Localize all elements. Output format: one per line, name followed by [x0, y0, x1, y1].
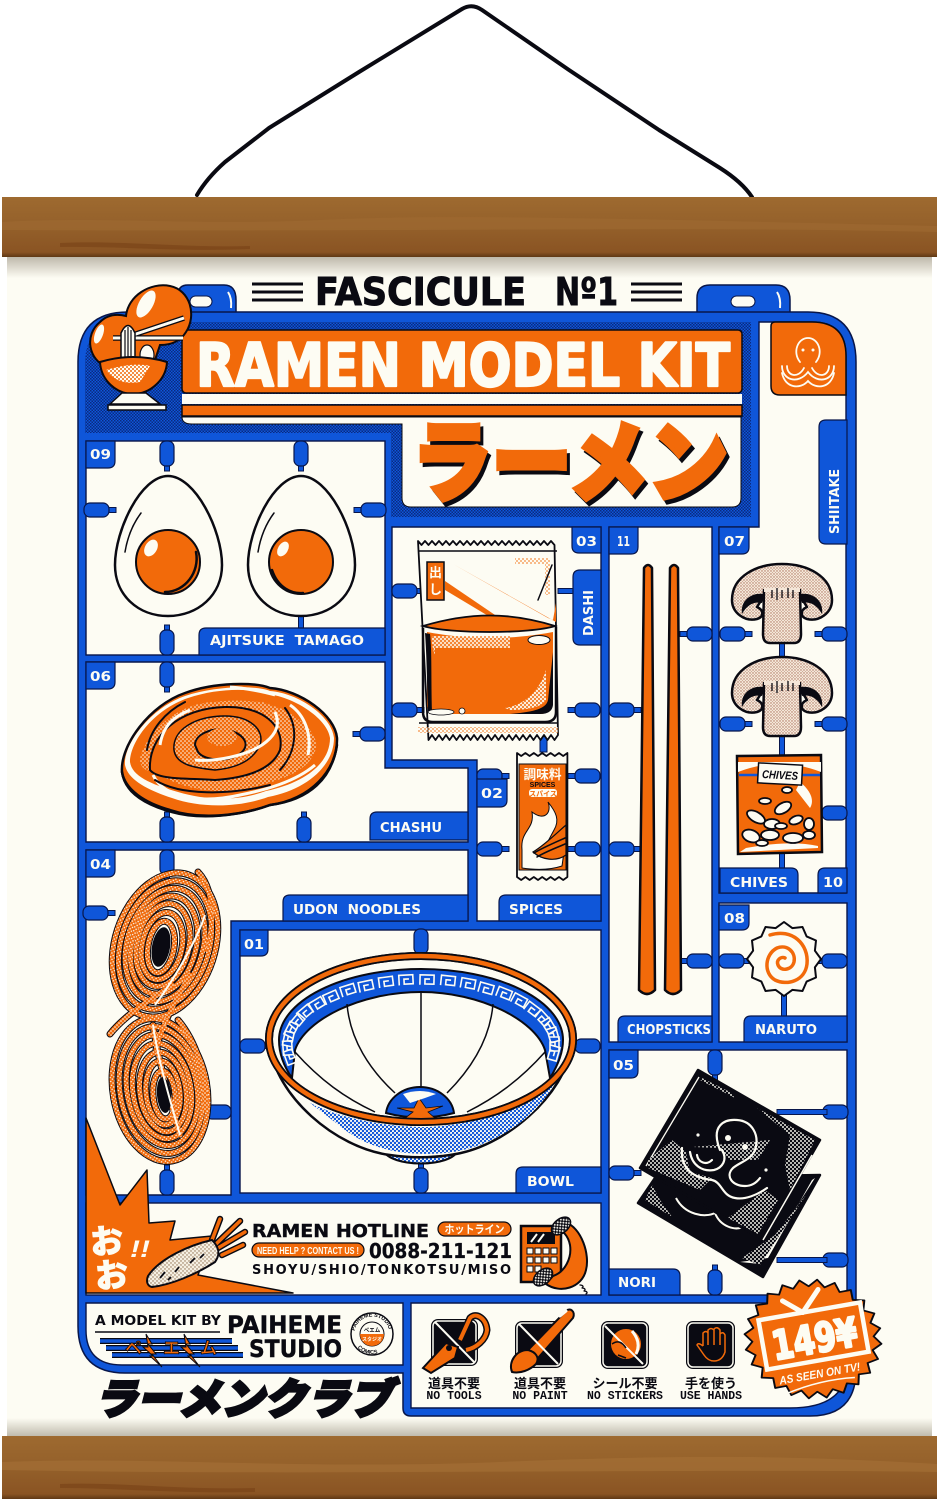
panel: ramen title banner: [182, 330, 742, 416]
label: nori: NORI: [618, 1276, 656, 1291]
studio name: STUDIO: [249, 1335, 342, 1363]
tag 01: [240, 930, 268, 956]
panel: model kit by paiheme studio: [85, 1302, 404, 1368]
tag 09: 09: [90, 448, 111, 463]
banner heading: RAMEN MODEL KIT: [196, 331, 730, 401]
illustration: mushroom bottom: [732, 657, 832, 736]
label: chives: CHIVES: [730, 876, 788, 891]
label: dashi: DASHI: [582, 590, 597, 636]
icon: no stickers: NO STICKERS: [587, 1390, 663, 1403]
icon: use hands: [680, 1321, 742, 1403]
pill: hotline katakana: ホットライン: [444, 1223, 504, 1236]
tag 08: 08: [724, 912, 745, 927]
hanging string: [197, 6, 752, 197]
katakana ramen club logo: ラーメンクラブ: [94, 1366, 400, 1427]
panel 05: nori: [609, 1050, 848, 1295]
studio name: PAIHEME: [227, 1311, 342, 1339]
round studio stamp: スタジオ: [362, 1336, 382, 1343]
bottom wood bar: [2, 1436, 937, 1499]
tag 07: 07: [724, 535, 745, 550]
tag 11: 11: [617, 535, 630, 550]
title: fascicule no 1: FASCICULE: [315, 270, 526, 314]
label: shiitake: SHIITAKE: [828, 469, 843, 534]
badge: octopus logo: [771, 322, 846, 395]
label: chopsticks: [618, 1016, 712, 1042]
pill: need help: NEED HELP ? CONTACT US !: [257, 1245, 359, 1257]
header dither background: [85, 322, 751, 517]
label: chashu: [370, 812, 468, 840]
pill: need help: [252, 1243, 364, 1257]
illustration: chopstick left: [639, 565, 655, 994]
tag 09: [86, 441, 115, 468]
orange exclamation burst: お: [88, 1214, 125, 1264]
illustration: chives bag: CHIVES: [762, 769, 799, 783]
label: bowl: [516, 1167, 601, 1193]
label: udon noodles: [283, 895, 468, 921]
label: shiitake: [819, 420, 847, 544]
panel 03 and 02: dashi and spices: [392, 527, 601, 921]
caption: シール不要: [592, 1376, 658, 1391]
price badge: as seen on tv: [740, 1275, 886, 1403]
illustration: mushroom top: [732, 564, 832, 643]
label: chives: [720, 868, 798, 893]
tag 03: [572, 527, 601, 553]
sprue gates for chashu: [160, 662, 385, 842]
orange exclamation burst: お: [93, 1248, 130, 1298]
tag 01: 01: [244, 938, 264, 953]
credit line: A MODEL KIT BY: [95, 1314, 222, 1329]
label: chopsticks: CHOPSTICKS: [627, 1023, 711, 1038]
egg right: [248, 476, 355, 616]
tag 02: [477, 779, 507, 807]
tag 05: 05: [613, 1059, 634, 1074]
sprue gates for mushrooms and chives: [720, 627, 847, 868]
tag 02: 02: [481, 787, 503, 802]
tag 04: [86, 850, 115, 877]
tagline: AS SEEN ON TV!: [778, 1361, 861, 1388]
round studio stamp: ペエム: [364, 1327, 381, 1334]
panel 08: naruto: [719, 903, 847, 1042]
panel: no tools legend: [411, 1303, 847, 1408]
sprue gates for nori: [609, 1050, 848, 1295]
tag 03: 03: [576, 535, 597, 550]
label: spices: [499, 895, 601, 921]
label: ajitsuke tamago: [199, 628, 385, 655]
studio speed logo: [100, 1334, 243, 1367]
panel: ramen hotline: [86, 1118, 601, 1298]
sprue gates for bowl: [240, 929, 600, 1193]
illustration: dashi pouch: し: [429, 582, 442, 597]
round studio stamp: [350, 1312, 394, 1356]
sprue gates for noodles: [83, 850, 231, 1195]
tag 06: [86, 662, 115, 689]
phone number: 0088-211-121: [369, 1239, 512, 1263]
panel 06: chashu: [86, 662, 468, 842]
caption: 手を使う: [685, 1376, 737, 1391]
icon: no tools: [423, 1316, 487, 1403]
sprue gates for chopsticks: [609, 627, 712, 968]
sprue gates for naruto: [719, 954, 847, 1017]
panel 07: shiitake and 10: chives: [719, 527, 847, 893]
icon: no stickers: [587, 1321, 663, 1403]
illustration: dashi pouch: 出: [429, 565, 442, 580]
price: 149¥: [768, 1310, 861, 1370]
panel 09: ajitsuke tamago: [84, 441, 386, 655]
studio speed logo: ペ: [125, 1334, 142, 1359]
blue sprue frame: [78, 312, 856, 1416]
round studio stamp: PAIHEME STUDIO: [352, 1314, 392, 1331]
illustration: chashu pork slice: [122, 684, 337, 816]
illustration: spices sachet: [517, 753, 567, 880]
label: nori: [609, 1269, 680, 1295]
tag 10: [818, 868, 847, 893]
tag 11: [609, 527, 638, 554]
illustration: naruto fishcake: [747, 922, 821, 996]
label: naruto: NARUTO: [755, 1023, 817, 1038]
caption: 道具不要: [428, 1376, 480, 1391]
sprue gates for eggs: [84, 441, 386, 655]
label: ajitsuke tamago: AJITSUKE TAMAGO: [210, 634, 364, 649]
illustration: steaming ramen bowl mascot: [90, 285, 191, 410]
round studio stamp: COMICS: [358, 1346, 378, 1354]
illustration: spices sachet: 調味料: [524, 767, 562, 782]
illustration: ramen bowl: [269, 956, 573, 1164]
label: chashu: CHASHU: [380, 821, 442, 836]
label: dashi: [573, 570, 601, 645]
illustration: dashi pouch: [418, 541, 558, 740]
ramen varieties: SHOYU/SHIO/TONKOTSU/MISO: [252, 1263, 511, 1278]
title: fascicule no 1: Nº1: [555, 270, 618, 314]
illustration: telephone: [521, 1214, 587, 1294]
orange exclamation burst: [86, 1118, 293, 1298]
title: fascicule no 1: [252, 270, 682, 314]
icon: no paint: [511, 1310, 574, 1403]
illustration: wasabi root: [147, 1219, 245, 1287]
tag 10: 10: [823, 876, 843, 891]
egg left: [115, 476, 222, 616]
tag 07: [719, 527, 749, 554]
panel 11: chopsticks: [609, 527, 712, 1042]
label: udon noodles: UDON NOODLES: [293, 903, 421, 918]
illustration: nori sheets: [638, 1070, 820, 1277]
caption: 道具不要: [514, 1376, 566, 1391]
orange exclamation burst: !!: [130, 1236, 150, 1263]
label: spices: SPICES: [509, 903, 563, 918]
panel 04: udon noodles: [83, 850, 468, 1195]
illustration: noodle bundle: [95, 859, 235, 1169]
studio speed logo: ム: [200, 1334, 217, 1359]
icon: use hands: USE HANDS: [680, 1390, 742, 1403]
icon: no tools: NO TOOLS: [426, 1390, 482, 1403]
top wood bar: [2, 197, 937, 257]
tag 05: [609, 1050, 638, 1078]
paper sheet: [7, 250, 932, 1445]
tag 06: 06: [90, 670, 111, 685]
illustration: chives bag: [737, 755, 822, 854]
sprue gates for dashi and spices: [392, 584, 600, 856]
panel: katakana ramen title: [182, 393, 741, 520]
illustration: spices sachet: スパイス: [529, 790, 557, 798]
katakana heading: ラーメン: [412, 393, 728, 520]
hotline heading: RAMEN HOTLINE: [252, 1221, 429, 1242]
panel: top right area: [719, 322, 846, 893]
top sprue tab left: [178, 285, 236, 316]
tag 04: 04: [90, 858, 111, 873]
panel 01: bowl: [240, 929, 601, 1193]
top sprue tab right: [697, 285, 790, 316]
studio name: [227, 1311, 342, 1363]
illustration: spices sachet: SPICES: [530, 782, 556, 789]
studio speed logo: エ: [163, 1334, 180, 1359]
illustration: chopstick right: [665, 565, 681, 994]
icon: no paint: NO PAINT: [512, 1390, 568, 1403]
label: bowl: BOWL: [527, 1175, 574, 1190]
